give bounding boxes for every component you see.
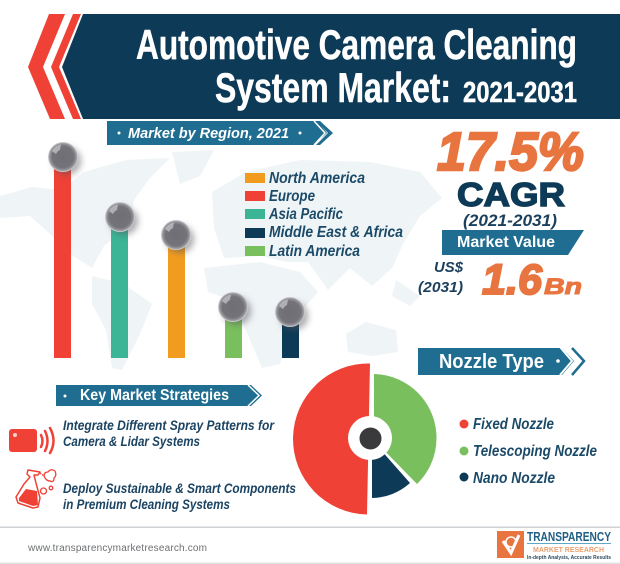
icon: spray bottle <box>16 470 56 508</box>
header banner <box>28 14 620 119</box>
nozzle type legend: Fixed Nozzle <box>473 416 554 433</box>
footer url: www.transparencymarketresearch.com <box>27 543 207 554</box>
slice: fixed nozzle <box>293 363 370 514</box>
CAGR statistic <box>437 122 584 230</box>
strategy text 2: Deploy Sustainable & Smart Components <box>63 481 296 496</box>
market value figure: US$ <box>434 259 464 276</box>
logo mark <box>497 531 524 558</box>
bar: Europe <box>48 142 81 358</box>
chart legend: Middle East & Africa <box>269 224 403 241</box>
nozzle type legend <box>460 416 597 487</box>
pie centre <box>348 416 392 460</box>
market value banner <box>442 230 584 255</box>
section heading: market by region: Market by Region, 2021 <box>128 125 289 142</box>
icon: camera with signal <box>9 428 54 453</box>
chart legend: Latin America <box>269 243 360 260</box>
section heading: market by region <box>107 121 333 145</box>
chart legend: North America <box>269 170 365 187</box>
market value figure <box>418 256 582 304</box>
bar: Asia Pacific <box>105 202 138 358</box>
nozzle type legend: Nano Nozzle <box>473 470 555 487</box>
title: 2021-2031 <box>463 77 577 109</box>
CAGR statistic: (2021-2031) <box>463 211 557 230</box>
bar: Latin America <box>218 292 251 358</box>
section heading: key market strategies: Key Market Strategies <box>80 387 229 404</box>
section heading: key market strategies <box>56 385 262 406</box>
strategy text 1: Integrate Different Spray Patterns for <box>63 418 275 433</box>
pie chart: nozzle type <box>293 363 437 514</box>
slice: nano nozzle <box>372 440 410 498</box>
nozzle type legend: Telescoping Nozzle <box>473 443 597 460</box>
market value figure: (2031) <box>418 279 463 296</box>
slice: telescoping nozzle <box>374 374 437 484</box>
section heading: nozzle type: Nozzle Type <box>439 351 544 373</box>
logo <box>497 529 611 561</box>
chart legend: Europe <box>269 188 315 205</box>
market value figure: Bn <box>544 274 582 299</box>
strategy text 1: Camera & Lidar Systems <box>63 434 200 449</box>
section heading: nozzle type <box>418 347 584 375</box>
bar: Middle East and Africa <box>275 297 308 358</box>
CAGR statistic: CAGR <box>457 176 565 213</box>
background world map <box>0 150 442 370</box>
market value figure: 1.6 <box>482 256 543 304</box>
CAGR statistic: 17.5% <box>437 122 584 182</box>
market value banner: Market Value <box>457 234 555 251</box>
title <box>136 21 577 111</box>
chart legend <box>245 170 403 260</box>
strategy text 2: in Premium Cleaning Systems <box>63 497 230 512</box>
chart legend: Asia Pacific <box>268 206 343 223</box>
logo: In-depth Analysis, Accurate Results <box>527 555 611 561</box>
strategy text 2 <box>63 481 296 512</box>
banner background <box>62 14 620 119</box>
red chevrons <box>28 14 81 119</box>
footer rules <box>0 526 620 564</box>
strategy text 1 <box>63 418 275 449</box>
bar: North America <box>161 220 194 358</box>
logo: MARKET RESEARCH <box>533 545 604 554</box>
title: System Market: <box>215 64 451 111</box>
bar chart: market by region <box>48 142 308 358</box>
